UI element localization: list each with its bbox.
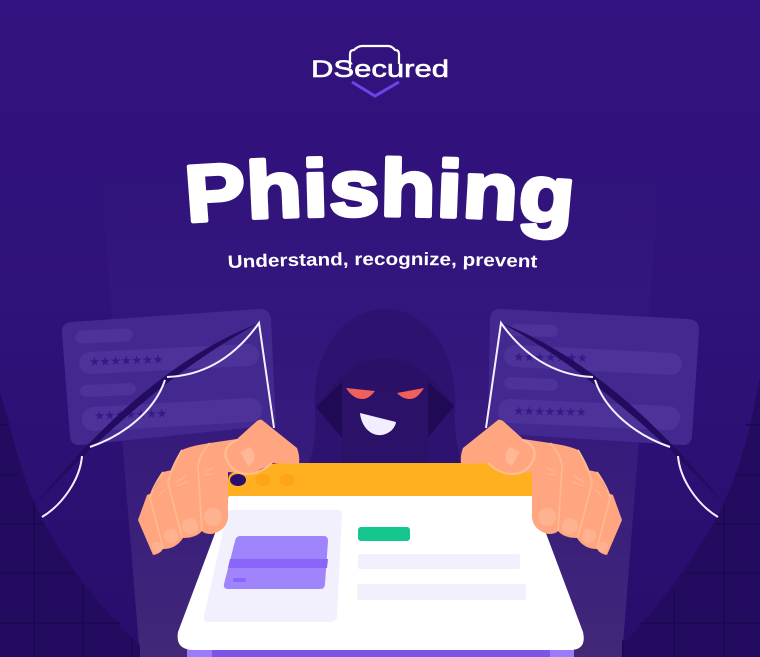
palm and fingers xyxy=(461,420,622,555)
right dark city panel xyxy=(622,377,760,657)
line xyxy=(486,323,718,517)
left content panel xyxy=(204,510,342,622)
panel: right login form xyxy=(488,309,699,445)
rod xyxy=(501,323,725,505)
password stars: ★★★★★★★ xyxy=(513,350,588,365)
window header xyxy=(228,463,532,500)
password stars: ★★★★★★★ xyxy=(513,404,587,419)
green button xyxy=(358,527,410,541)
left eye xyxy=(346,388,375,399)
window dot orange xyxy=(255,474,271,486)
palm and fingers xyxy=(138,420,299,555)
left fishing rod and line xyxy=(35,323,274,517)
thumb nail xyxy=(240,447,254,466)
hacker xyxy=(308,309,462,465)
rod xyxy=(35,323,259,505)
logo shield xyxy=(350,46,399,68)
finger creases xyxy=(150,443,210,548)
knuckle lines xyxy=(546,468,602,497)
bottom edge of window xyxy=(187,648,574,657)
logo chevron xyxy=(352,82,399,96)
card dash xyxy=(233,578,246,582)
right hood fold xyxy=(415,382,454,453)
knuckle lines xyxy=(158,468,214,497)
window dot dark xyxy=(230,474,246,486)
logo xyxy=(311,46,449,96)
panel: left login form xyxy=(62,309,276,445)
window body xyxy=(178,496,584,650)
right eye xyxy=(397,388,424,399)
finger creases xyxy=(550,443,610,548)
window dot orange xyxy=(279,474,295,486)
light beam xyxy=(100,170,660,657)
line xyxy=(42,323,274,517)
right fishing rod and line xyxy=(486,323,725,517)
thumb outline xyxy=(225,440,272,474)
title: Phishing xyxy=(186,156,572,240)
finger nails xyxy=(152,508,222,552)
browser window xyxy=(178,463,584,650)
hood xyxy=(308,309,462,465)
thumb nail xyxy=(506,447,520,466)
right hand xyxy=(461,420,622,555)
password stars: ★★★★★★★ xyxy=(94,406,167,423)
logo wordmark: DSecured xyxy=(311,56,449,83)
text line xyxy=(358,554,520,569)
subtitle: Understand, recognize, prevent xyxy=(228,252,538,270)
text line xyxy=(357,584,526,600)
left dark city panel xyxy=(0,393,140,657)
left hood fold xyxy=(316,382,355,453)
face xyxy=(342,392,428,465)
credit card xyxy=(224,536,328,589)
thumb outline xyxy=(488,440,535,474)
password stars: ★★★★★★★ xyxy=(89,352,164,369)
left hand xyxy=(138,420,299,555)
hood opening xyxy=(316,358,454,453)
finger nails xyxy=(538,508,608,552)
card stripe xyxy=(228,559,328,568)
mouth xyxy=(360,413,396,435)
